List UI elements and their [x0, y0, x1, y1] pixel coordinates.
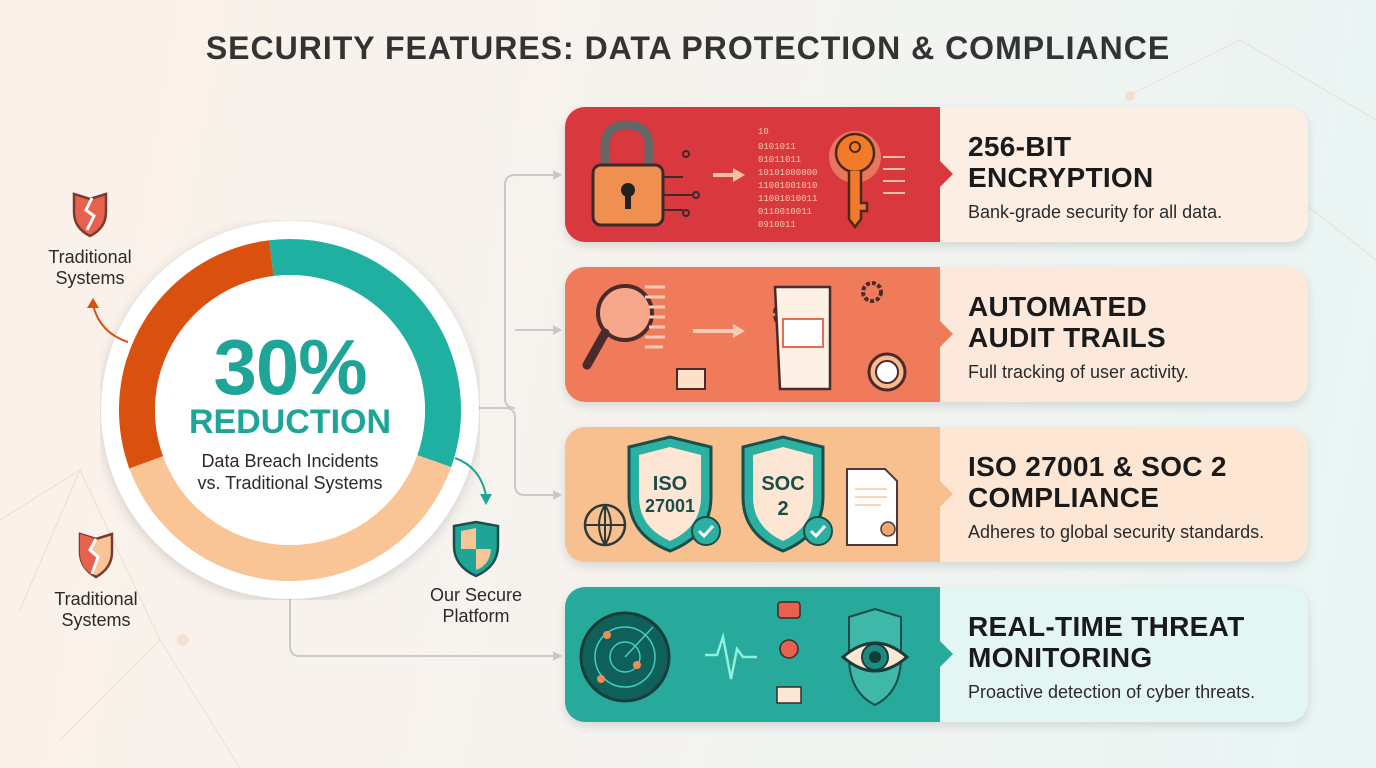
donut chart: [100, 220, 480, 600]
icon: lock and key: 10: [758, 127, 769, 137]
card: 256-bit encryption: ENCRYPTION: [968, 162, 1154, 193]
card: real-time threat monitoring: Proactive detection of cyber threats.: [968, 682, 1255, 702]
icon: secure shield: [452, 520, 500, 578]
card: real-time threat monitoring: REAL-TIME THREAT: [968, 611, 1244, 642]
icon: compliance shields: 27001: [645, 496, 695, 516]
card: 256-bit encryption: Bank-grade security for all data.: [968, 202, 1222, 222]
donut center text: vs. Traditional Systems: [197, 473, 383, 493]
label: traditional systems bottom: [54, 532, 138, 630]
card: 256-bit encryption: [565, 107, 1308, 242]
title: SECURITY FEATURES: DATA PROTECTION & COMPLIANCE: [206, 30, 1170, 66]
card: real-time threat monitoring: [565, 587, 1308, 722]
label: traditional systems bottom: Systems: [61, 610, 130, 630]
label: our secure platform: Our Secure: [430, 585, 522, 605]
icon: lock and key: 0910011: [758, 220, 796, 230]
icon: lock and key: 11001001010: [758, 181, 817, 191]
arrow: orange to label: [87, 298, 128, 343]
label: traditional systems top: Traditional: [48, 247, 132, 267]
card: iso 27001 & soc 2: Adheres to global security standards.: [968, 522, 1264, 542]
label: traditional systems top: Systems: [55, 268, 124, 288]
icon: radar and eye: [580, 601, 910, 706]
label: our secure platform: Platform: [442, 606, 510, 626]
card: automated audit trails: Full tracking of user activity.: [968, 362, 1189, 382]
card: iso 27001 & soc 2: ISO 27001 & SOC 2: [968, 451, 1227, 482]
card: automated audit trails: AUTOMATED: [968, 291, 1147, 322]
donut center text: REDUCTION: [189, 403, 391, 441]
icon: compliance shields: ISO: [653, 473, 687, 495]
icon: lock and key: [592, 120, 905, 230]
icon: compliance shields: [584, 436, 898, 553]
donut center text: 30%: [213, 323, 367, 411]
card: iso 27001 & soc 2: [565, 427, 1308, 562]
card: automated audit trails: [565, 267, 1308, 402]
card: iso 27001 & soc 2: COMPLIANCE: [968, 482, 1159, 513]
arrow: teal to platform: [454, 457, 492, 505]
icon: broken shield: [72, 192, 108, 238]
icon: compliance shields: 2: [777, 498, 789, 520]
icon: lock and key: 10101000800: [758, 168, 817, 178]
icon: broken shield two-tone: [78, 532, 114, 578]
icon: magnifier and audit log: [582, 281, 906, 392]
label: our secure platform: [430, 520, 522, 626]
card: 256-bit encryption: 256-BIT: [968, 131, 1071, 162]
icon: compliance shields: SOC: [761, 473, 805, 495]
icon: lock and key: 0101011: [758, 142, 796, 152]
donut center text: [189, 323, 391, 493]
icon: lock and key: 11001010011: [758, 194, 817, 204]
label: traditional systems top: [48, 192, 132, 288]
icon: lock and key: 01011011: [758, 155, 801, 165]
card: automated audit trails: AUDIT TRAILS: [968, 322, 1166, 353]
icon: lock and key: 0110010011: [758, 207, 812, 217]
label: traditional systems bottom: Traditional: [54, 589, 138, 609]
donut center text: Data Breach Incidents: [201, 451, 379, 471]
card: real-time threat monitoring: MONITORING: [968, 642, 1152, 673]
